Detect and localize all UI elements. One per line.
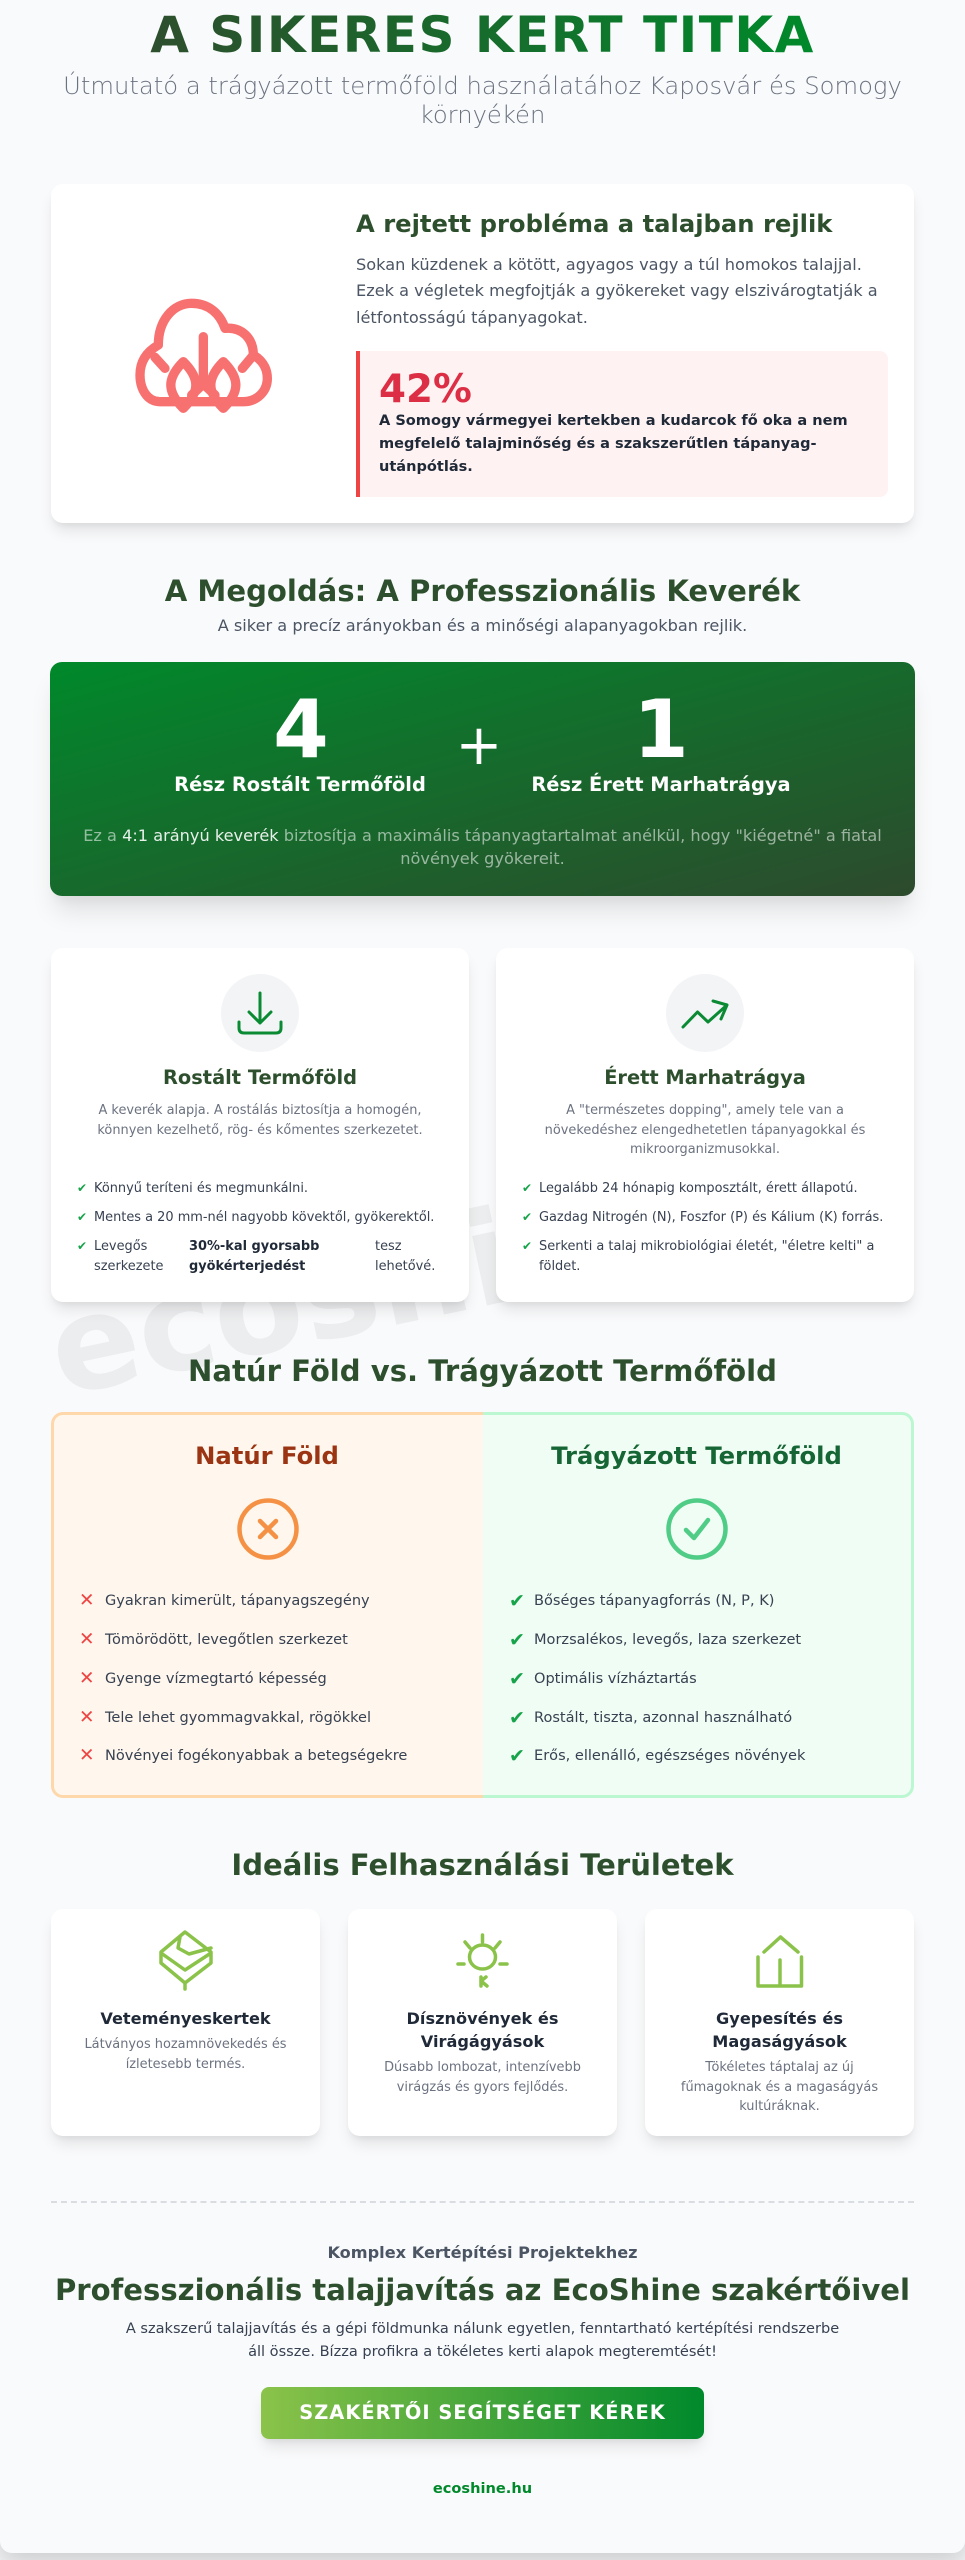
statistic text: megfelelő talajminőség és a szakszerűtlen tápanyag- xyxy=(379,435,817,452)
list: natural soil: Tele lehet gyommagvakkal, rögökkel xyxy=(105,1709,371,1726)
check list: tesz xyxy=(375,1239,402,1254)
list: fertilized soil: Rostált, tiszta, azonnal használható xyxy=(534,1709,792,1726)
list: natural soil: Gyakran kimerült, tápanyagszegény xyxy=(105,1592,370,1609)
check list: Könnyű teríteni és megmunkálni. xyxy=(94,1181,308,1196)
icon: damaged soil cloud xyxy=(135,298,272,413)
check list: gyökérterjedést xyxy=(189,1259,305,1274)
heading: fertilized soil: Trágyázott Termőföld xyxy=(551,1441,842,1470)
description: kultúráknak. xyxy=(739,2099,820,2114)
heading: Magaságyások xyxy=(712,2032,847,2051)
heading: Gyepesítés és xyxy=(716,2009,843,2028)
label left: Rész Rostált Termőföld xyxy=(174,773,426,796)
label right: Rész Érett Marhatrágya xyxy=(531,773,791,796)
icon: download xyxy=(221,974,299,1052)
panel: ripe manure xyxy=(496,948,914,1302)
CTA heading: Professzionális talajjavítás az EcoShine szakértőivel xyxy=(55,2273,910,2307)
list: fertilized soil: ✔ xyxy=(509,1629,525,1651)
note: Ez a 4:1 arányú keverék biztosítja a maximális tápanyagtartalmat anélkül, hogy "kiégetné" a fiatal xyxy=(83,826,882,845)
check list: 30%-kal gyorsabb xyxy=(189,1239,319,1254)
list: natural soil: ✕ xyxy=(79,1745,95,1766)
panel: lawns and raised beds xyxy=(645,1909,914,2136)
check list: ✔ xyxy=(77,1239,87,1253)
heading: natural soil: Natúr Föld xyxy=(195,1441,339,1470)
description: fűmagoknak és a magaságyás xyxy=(681,2080,878,2095)
icon: download glyph xyxy=(238,992,282,1034)
check list: szerkezete xyxy=(94,1259,164,1274)
description xyxy=(97,1103,423,1138)
panel: ornamental plants xyxy=(348,1909,617,2136)
list: fertilized soil: ✔ xyxy=(509,1707,525,1729)
heading xyxy=(712,2009,847,2051)
check list: Levegős xyxy=(94,1239,147,1254)
plus sign: + xyxy=(456,713,502,778)
statistic: 42% xyxy=(379,367,472,412)
list: fertilized soil: Bőséges tápanyagforrás (N, P, K) xyxy=(534,1592,774,1609)
subtitle: Útmutató a trágyázott termőföld használatához Kaposvár és Somogy xyxy=(63,71,902,100)
heading: Dísznövények és xyxy=(406,2009,558,2028)
subtitle: környékén xyxy=(420,100,545,129)
description xyxy=(84,2037,287,2072)
CTA button xyxy=(261,2387,704,2439)
description xyxy=(681,2060,878,2114)
text: problem description: létfontosságú tápanyagokat. xyxy=(356,308,588,327)
list: natural soil: ✕ xyxy=(79,1629,95,1650)
description xyxy=(545,1103,865,1157)
title: A SIKERES KERT TITKA xyxy=(150,6,815,64)
description: Dúsabb lombozat, intenzívebb xyxy=(384,2060,581,2075)
description: ízletesebb termés. xyxy=(126,2057,245,2072)
statistic text: A Somogy vármegyei kertekben a kudarcok fő oka a nem xyxy=(379,412,848,429)
text: solution subtitle: A siker a precíz arányokban és a minőségi alapanyagokban rejlik. xyxy=(218,616,747,635)
check list: ✔ xyxy=(522,1239,532,1253)
list: natural soil: ✕ xyxy=(79,1668,95,1689)
check list xyxy=(77,1181,435,1274)
icon: leaf box xyxy=(159,1930,213,1991)
watermark: ecoshine xyxy=(36,1143,703,1426)
check list: Gazdag Nitrogén (N), Foszfor (P) és Kálium (K) forrás. xyxy=(539,1210,883,1225)
heading: Veteményeskertek xyxy=(100,2009,271,2028)
description: könnyen kezelhető, rög- és kőmentes szerkezetet. xyxy=(97,1123,423,1138)
check list: Serkenti a talaj mikrobiológiai életét, "életre kelti" a xyxy=(539,1239,874,1254)
list: natural soil: ✕ xyxy=(79,1707,95,1728)
CTA text: áll össze. Bízza profikra a tökéletes kerti alapok megteremtését! xyxy=(248,2343,717,2360)
heading: Érett Marhatrágya xyxy=(604,1066,806,1089)
panel: mix ratio xyxy=(50,662,915,896)
number 4: 4 xyxy=(273,683,329,776)
check list: lehetővé. xyxy=(375,1259,435,1274)
list: natural soil: ✕ xyxy=(79,1590,95,1611)
list: natural soil: Növényei fogékonyabbak a betegségekre xyxy=(105,1747,407,1764)
heading: Rostált Termőföld xyxy=(163,1066,357,1089)
list: natural soil: Gyenge vízmegtartó képesség xyxy=(105,1670,327,1687)
text: problem description xyxy=(356,255,878,327)
list: natural soil: Tömörödött, levegőtlen szerkezet xyxy=(105,1631,348,1648)
heading: uses: Ideális Felhasználási Területek xyxy=(231,1848,734,1882)
description: növekedéshez elengedhetetlen tápanyagokkal és xyxy=(545,1123,865,1138)
description: A "természetes dopping", amely tele van a xyxy=(566,1103,844,1118)
check list: ✔ xyxy=(77,1210,87,1224)
check list: ✔ xyxy=(77,1181,87,1195)
statistic text xyxy=(379,412,848,475)
list: fertilized soil: Erős, ellenálló, egészséges növények xyxy=(534,1747,805,1764)
list: natural soil xyxy=(79,1590,407,1766)
statistic text: utánpótlás. xyxy=(379,458,473,475)
CTA text: A szakszerű talajjavítás és a gépi földmunka nálunk egyetlen, fenntartható kertépítési rendszerbe xyxy=(126,2320,839,2337)
icon: sun sprout xyxy=(456,1933,509,1988)
list: fertilized soil: ✔ xyxy=(509,1745,525,1767)
text: problem description: Sokan küzdenek a kötött, agyagos vagy a túl homokos talajjal. xyxy=(356,255,862,274)
note xyxy=(83,826,882,868)
heading: problem: A rejtett probléma a talajban rejlik xyxy=(356,209,832,238)
column: natural soil xyxy=(51,1412,483,1798)
check list xyxy=(522,1181,883,1274)
number 1: 1 xyxy=(633,683,689,776)
list: fertilized soil: Optimális vízháztartás xyxy=(534,1670,697,1687)
heading: solution: A Megoldás: A Professzionális Keverék xyxy=(165,574,800,608)
heading xyxy=(406,2009,558,2051)
list: fertilized soil: Morzsalékos, levegős, laza szerkezet xyxy=(534,1631,801,1648)
text: problem description: Ezek a végletek megfojtják a gyökereket vagy elszivárogtatják a xyxy=(356,281,878,300)
subtitle xyxy=(63,71,902,129)
CTA eyebrow: Komplex Kertépítési Projektekhez xyxy=(327,2243,638,2262)
panel: vegetable gardens xyxy=(51,1909,320,2136)
icon: house xyxy=(756,1935,804,1988)
icon: x circle xyxy=(237,1498,299,1560)
panel: problem xyxy=(51,184,914,523)
CTA button: SZAKÉRTŐI SEGÍTSÉGET KÉREK xyxy=(299,2401,666,2424)
check list: Mentes a 20 mm-nél nagyobb kövektől, gyökerektől. xyxy=(94,1210,434,1225)
description: virágzás és gyors fejlődés. xyxy=(397,2080,568,2095)
icon: check circle xyxy=(666,1498,728,1560)
check list: ✔ xyxy=(522,1210,532,1224)
heading: Virágágyások xyxy=(421,2032,544,2051)
column: fertilized soil xyxy=(483,1412,914,1798)
footer link: ecoshine.hu xyxy=(433,2480,532,2497)
icon: trend glyph xyxy=(681,1000,729,1029)
callout: 42 percent xyxy=(356,351,888,497)
check list: Legalább 24 hónapig komposztált, érett állapotú. xyxy=(539,1181,858,1196)
check list: ✔ xyxy=(522,1181,532,1195)
description: Tökéletes táptalaj az új xyxy=(705,2060,854,2075)
description: mikroorganizmusokkal. xyxy=(630,1142,780,1157)
CTA text xyxy=(126,2320,839,2360)
description xyxy=(384,2060,581,2095)
panel: sieved soil xyxy=(51,948,469,1302)
description: Látványos hozamnövekedés és xyxy=(84,2037,287,2052)
heading: comparison: Natúr Föld vs. Trágyázott Termőföld xyxy=(188,1354,777,1388)
list: fertilized soil xyxy=(509,1590,806,1767)
note: növények gyökereit. xyxy=(400,849,565,868)
icon: trend circle xyxy=(666,974,744,1052)
description: A keverék alapja. A rostálás biztosítja a homogén, xyxy=(98,1103,422,1118)
list: fertilized soil: ✔ xyxy=(509,1590,525,1612)
check list: földet. xyxy=(539,1259,580,1274)
panel: comparison xyxy=(51,1412,914,1798)
list: fertilized soil: ✔ xyxy=(509,1668,525,1690)
divider xyxy=(51,2201,914,2203)
